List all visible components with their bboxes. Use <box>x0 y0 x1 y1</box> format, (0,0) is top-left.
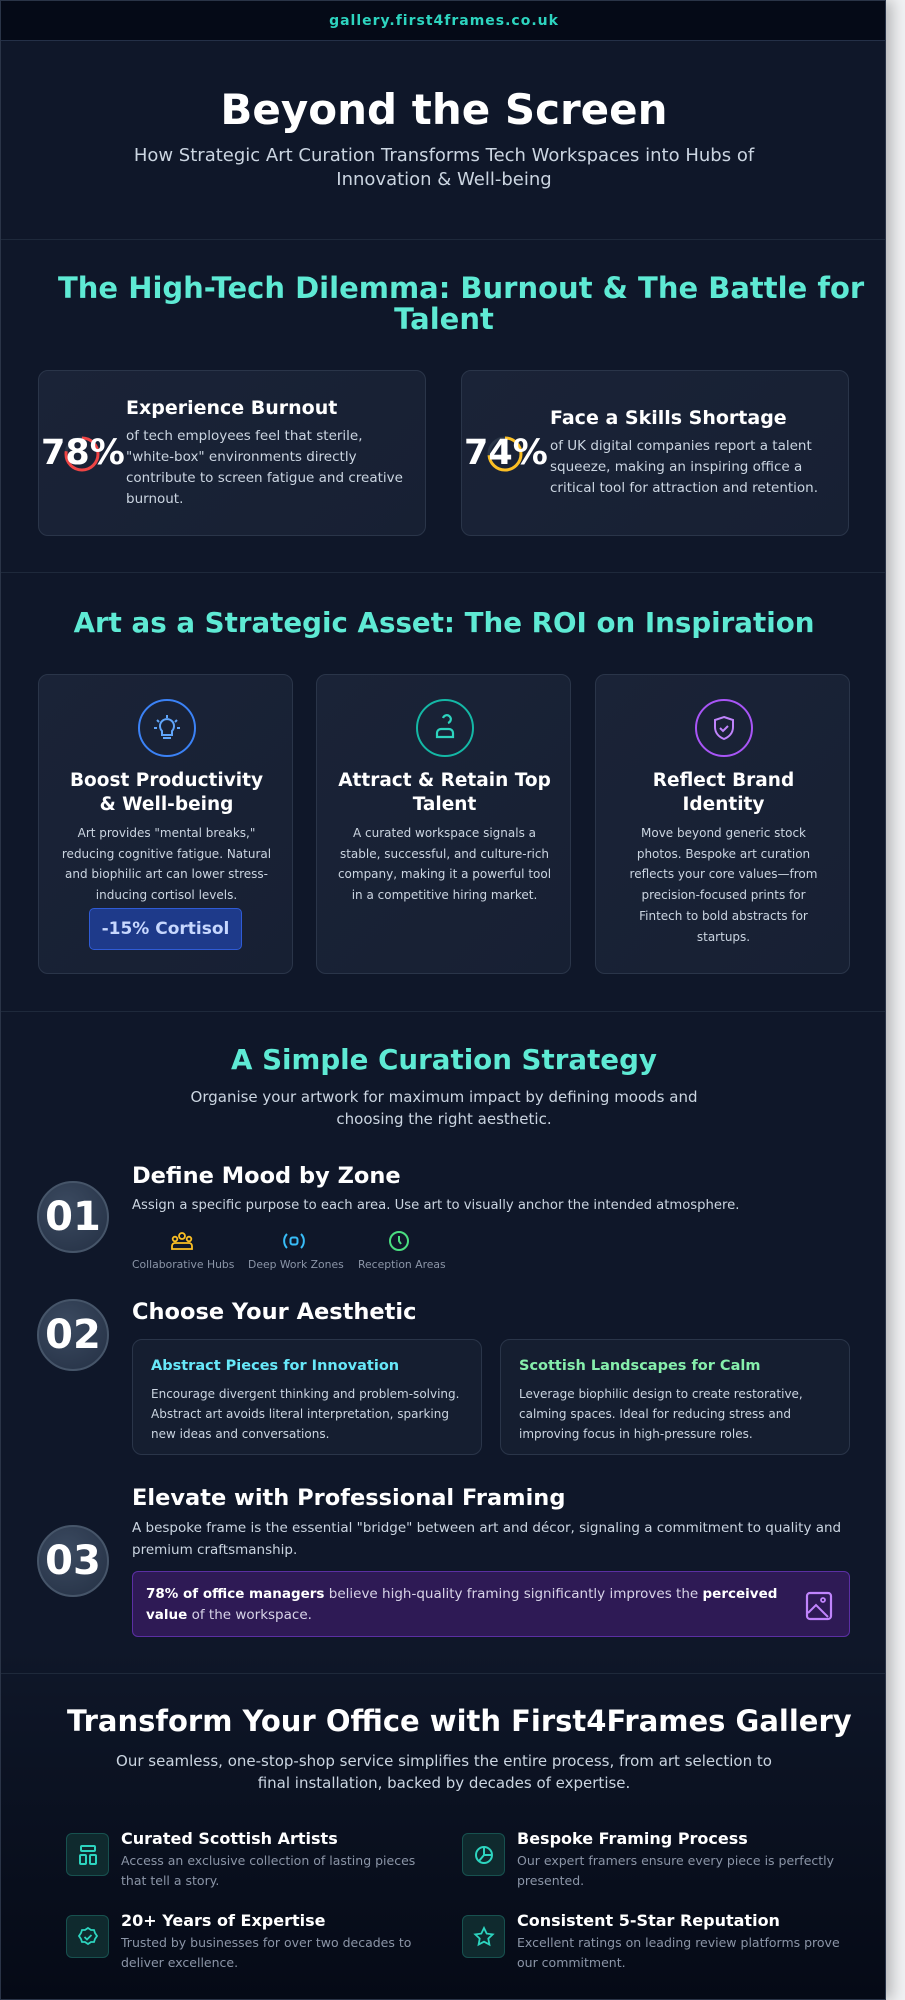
feature: curated artists: Access an exclusive collection of lasting pieces that tell a story. <box>121 1853 415 1888</box>
step 02 title: Choose Your Aesthetic <box>132 1299 416 1325</box>
card: abstract: Encourage divergent thinking and problem-solving. Abstract art avoids literal interpretation, sparking new ideas and conversations. <box>151 1387 459 1441</box>
card: landscapes <box>500 1339 850 1455</box>
step 01 badge <box>37 1181 109 1253</box>
heading: strategy: A Simple Curation Strategy <box>231 1043 657 1076</box>
feature: reputation <box>462 1911 840 1970</box>
icon: lightbulb <box>138 699 196 757</box>
card: landscapes: Scottish Landscapes for Calm <box>519 1358 760 1374</box>
icon: collaborative hubs <box>171 1232 193 1250</box>
title <box>70 770 263 814</box>
step 03 badge: 03 <box>45 1538 101 1584</box>
card: burnout <box>38 370 426 536</box>
heading: dilemma: The High-Tech Dilemma: Burnout & The Battle for <box>58 271 864 305</box>
feature: expertise: 20+ Years of Expertise <box>121 1911 325 1930</box>
text: of tech employees feel that sterile, <box>126 428 363 444</box>
icon: clock <box>389 1231 409 1251</box>
hero title: Beyond the Screen <box>220 85 668 134</box>
icon: shield <box>695 699 753 757</box>
feature: reputation: Consistent 5-Star Reputation <box>517 1911 780 1930</box>
top bar <box>1 1 887 41</box>
step 03 badge <box>37 1525 109 1597</box>
feature: bespoke framing: Our expert framers ensure every piece is perfectly presented. <box>517 1853 834 1888</box>
step 02 badge: 02 <box>45 1312 101 1358</box>
feature: bespoke framing <box>462 1829 834 1888</box>
feature: bespoke framing: Bespoke Framing Process <box>517 1829 748 1848</box>
title: Reflect Brand <box>653 770 794 791</box>
card: abstract <box>132 1339 482 1455</box>
badge: -15% Cortisol <box>102 919 229 939</box>
heading: dilemma: Talent <box>394 302 494 336</box>
step 02 badge <box>37 1299 109 1371</box>
text: Art provides "mental breaks," reducing cognitive fatigue. Natural and biophilic art can lower stress-inducing cortisol levels. <box>62 826 271 902</box>
feature: curated artists: Curated Scottish Artists <box>121 1829 338 1848</box>
card: abstract: Abstract Pieces for Innovation <box>151 1358 399 1374</box>
card: landscapes: Leverage biophilic design to create restorative, calming spaces. Ideal for reducing stress and improving focus in high-pressure roles. <box>519 1387 803 1441</box>
feature: expertise: Trusted by businesses for over two decades to deliver excellence. <box>121 1935 411 1970</box>
text: of UK digital companies report a talent squeeze, making an inspiring office a critical tool for attraction and retention. <box>550 438 818 496</box>
top bar: gallery.first4frames.co.uk <box>329 13 559 29</box>
title: Identity <box>683 794 764 814</box>
feature: curated artists <box>66 1829 415 1888</box>
stat 74: 74% <box>464 433 548 473</box>
strategy subtitle: Organise your artwork for maximum impact by defining moods and choosing the right aesthetic. <box>191 1088 697 1128</box>
feature: expertise <box>66 1911 411 1970</box>
title <box>653 770 794 814</box>
heading: dilemma <box>58 271 864 336</box>
zone icons: Collaborative Hubs <box>132 1258 234 1271</box>
ring chart 78 <box>64 436 100 472</box>
step 01 title: Define Mood by Zone <box>132 1163 401 1189</box>
CTA subtitle: Our seamless, one-stop-shop service simplifies the entire process, from art selection to final installation, backed by decades of expertise. <box>116 1752 772 1792</box>
step 01 text: Assign a specific purpose to each area. Use art to visually anchor the intended atmosphere. <box>132 1198 739 1213</box>
title: Attract & Retain Top <box>338 770 551 791</box>
heading: Experience Burnout <box>126 397 337 419</box>
step 01 badge: 01 <box>45 1194 101 1240</box>
icon: picture <box>806 1592 832 1620</box>
stat 78: 78% <box>41 433 125 473</box>
feature: reputation: Excellent ratings on leading review platforms prove our commitment. <box>517 1935 840 1970</box>
step 03 text: A bespoke frame is the essential "bridge" between art and décor, signaling a commitment to quality and premium craftsmanship. <box>132 1520 841 1558</box>
zone icons: Reception Areas <box>358 1258 446 1271</box>
callout: framing stat: 78% of office managers believe high-quality framing significantly improves the perceived value of the workspace. <box>146 1586 777 1623</box>
step 03 title: Elevate with Professional Framing <box>132 1485 565 1511</box>
title: Boost Productivity <box>70 770 263 791</box>
text: A curated workspace signals a stable, successful, and culture-rich company, making it a powerful tool in a competitive hiring market. <box>338 826 551 902</box>
card: productivity <box>38 674 293 974</box>
card: talent <box>316 674 571 974</box>
zone icons <box>132 1231 446 1271</box>
CTA heading: Transform Your Office with First4Frames Gallery <box>67 1704 852 1738</box>
badge <box>89 908 242 950</box>
icon: deep work <box>283 1233 305 1249</box>
title: Talent <box>413 794 476 814</box>
text: "white-box" environments directly contribute to screen fatigue and creative burnout. <box>126 449 403 507</box>
zone icons: Deep Work Zones <box>248 1258 344 1271</box>
icon: person <box>416 699 474 757</box>
card: skills shortage <box>461 370 849 536</box>
title <box>338 770 551 814</box>
title: & Well-being <box>100 794 233 814</box>
callout: framing stat <box>132 1571 850 1637</box>
heading: ROI: Art as a Strategic Asset: The ROI on Inspiration <box>74 606 814 639</box>
ring chart 74 <box>488 436 522 472</box>
hero subtitle: How Strategic Art Curation Transforms Tech Workspaces into Hubs of Innovation & Well-being <box>134 145 754 190</box>
heading: Face a Skills Shortage <box>550 407 787 429</box>
card: brand <box>595 674 850 974</box>
text: Move beyond generic stock photos. Bespoke art curation reflects your core values—from precision-focused prints for Fintech to bold abstracts for startups. <box>630 826 817 944</box>
